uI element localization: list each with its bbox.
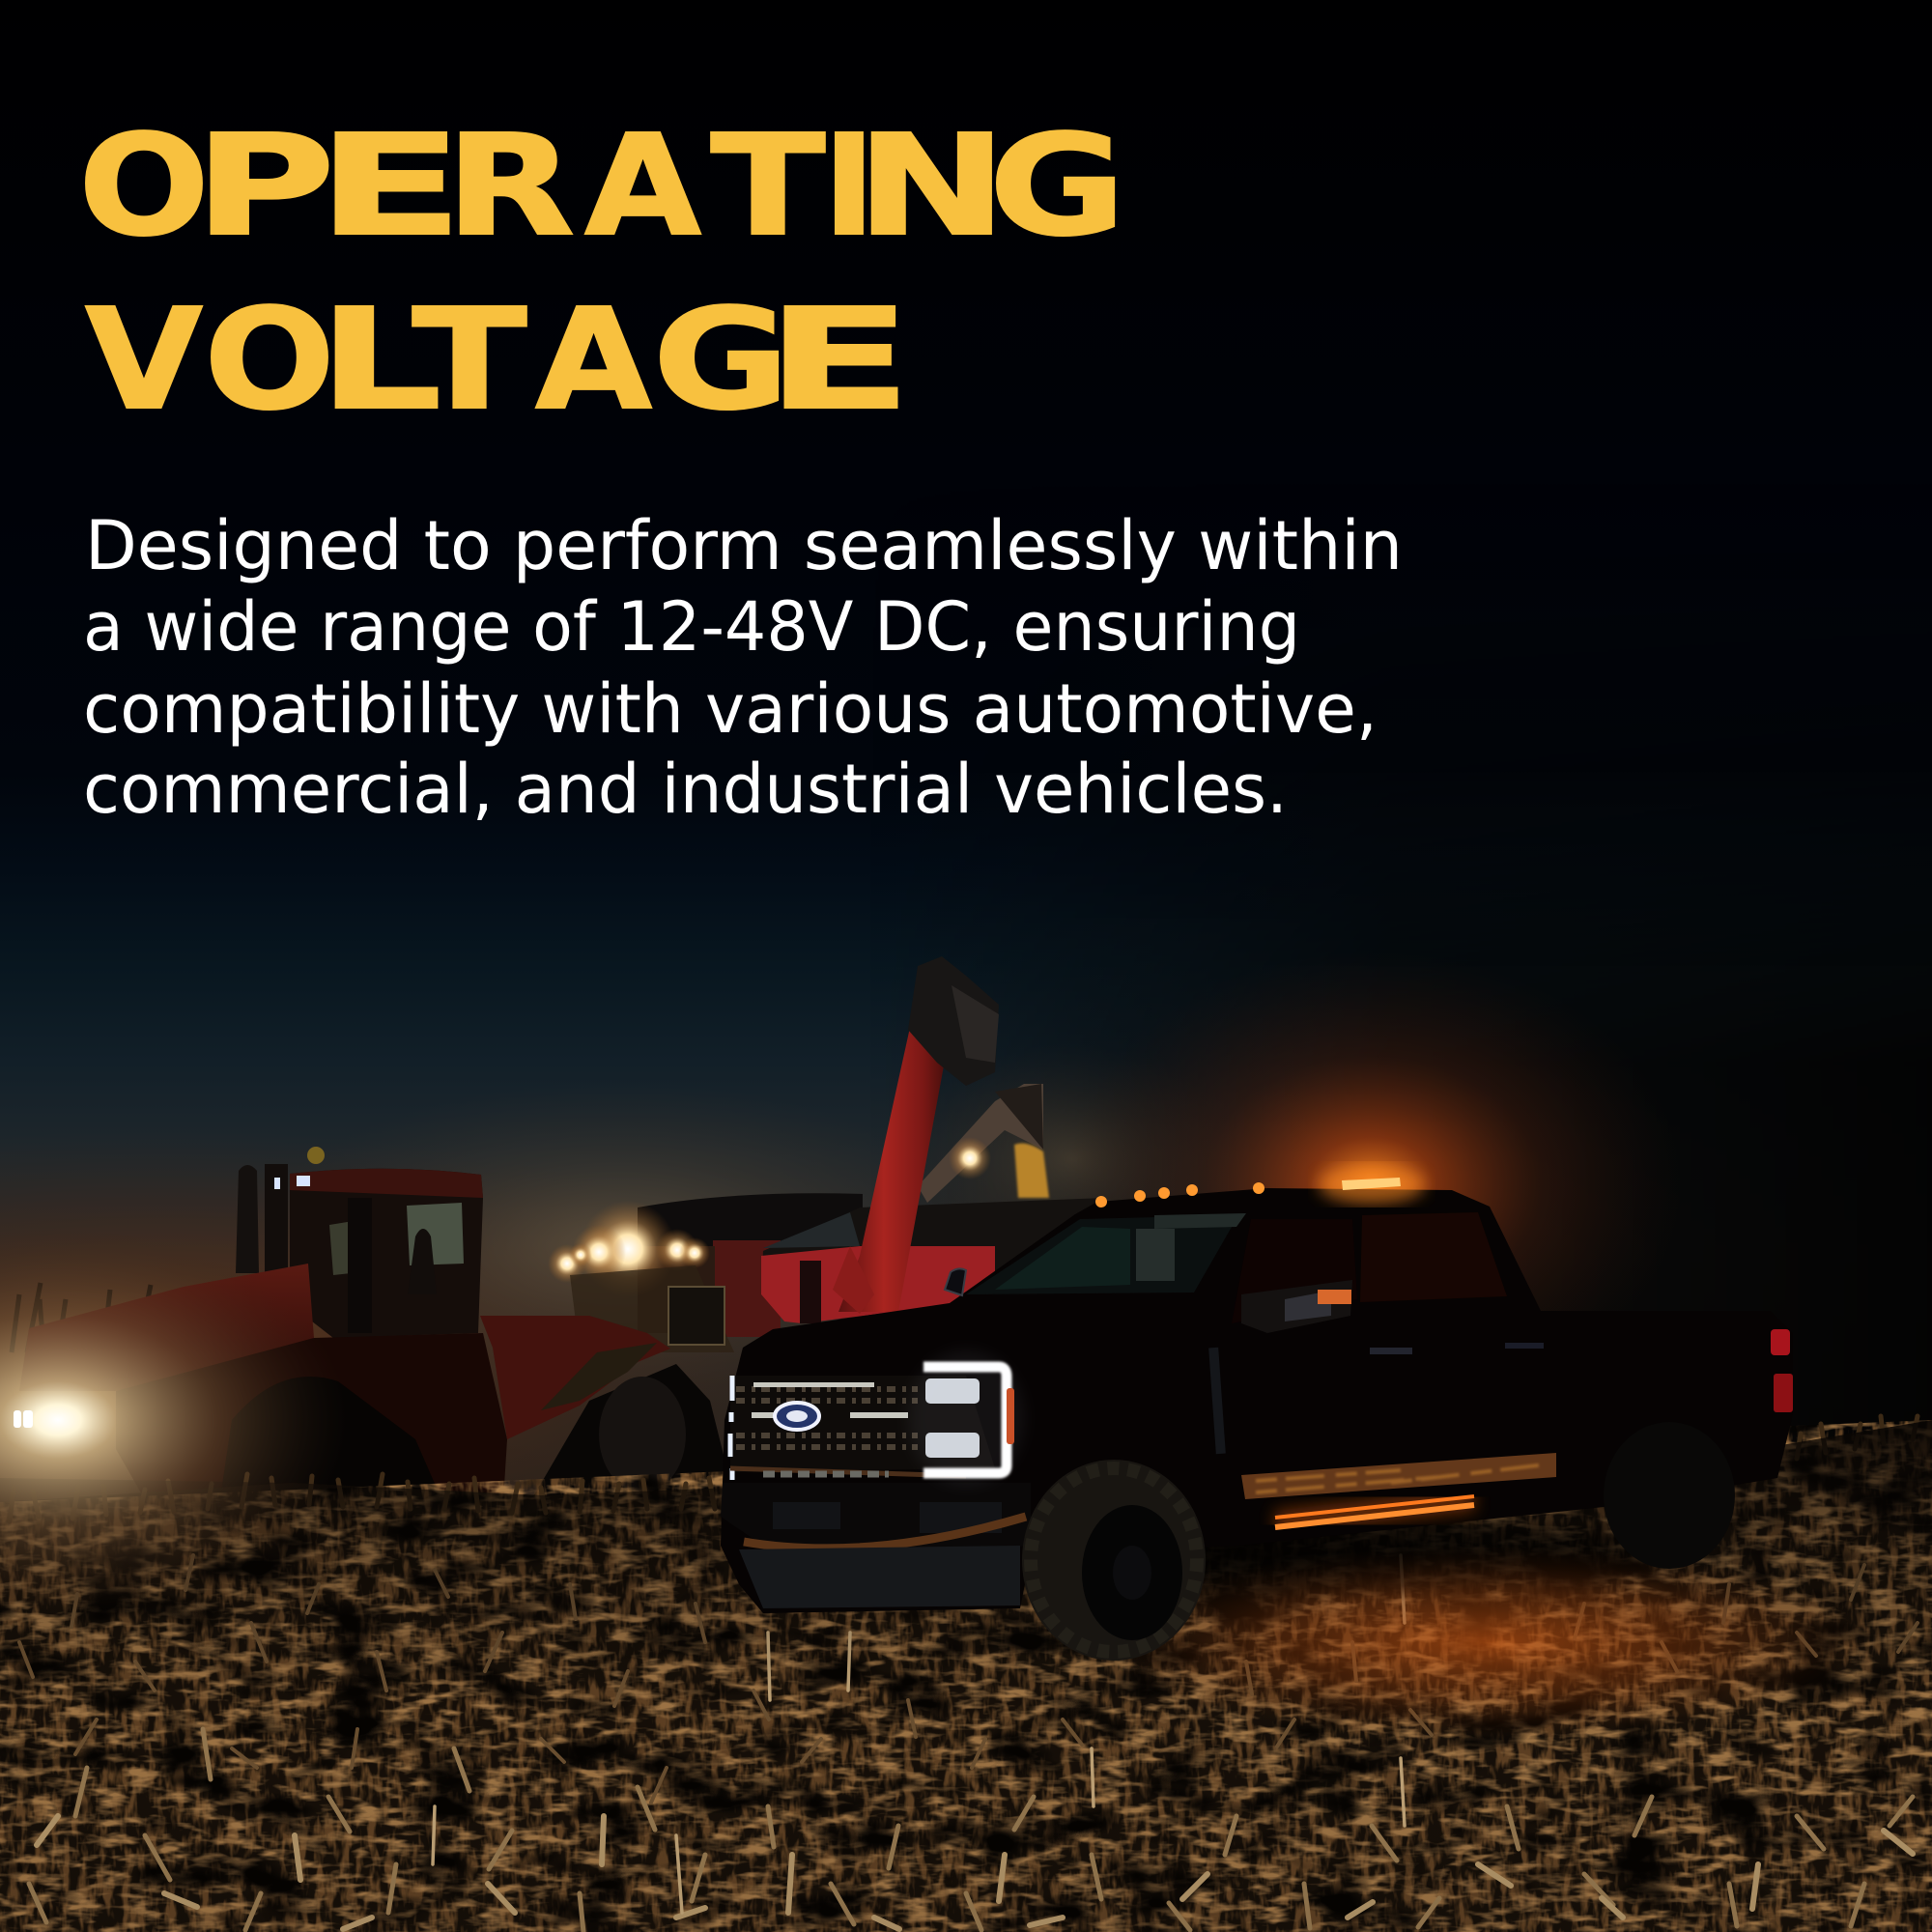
title line two: [84, 278, 912, 440]
title line two: A: [535, 278, 652, 440]
title line one: R: [445, 104, 575, 267]
title line two: O: [204, 278, 335, 440]
title line two: V: [85, 278, 203, 440]
title line one: G: [989, 104, 1126, 267]
grille: [730, 1376, 995, 1480]
rear fender: [480, 1316, 670, 1439]
falling grain: [1014, 1144, 1049, 1198]
ford oval badge: [775, 1403, 819, 1430]
grain cart, rear: [638, 1193, 863, 1337]
title line two: T: [412, 278, 527, 440]
edge stalks along the horizon of the field: [10, 1416, 1918, 1521]
amber glow from roof beacon: [1063, 952, 1681, 1415]
body text: a wide range of 12-48V DC, ensuring: [83, 587, 1300, 667]
tracks: [217, 1364, 724, 1517]
tractor headlight glow: [0, 1227, 348, 1613]
cab windows: [1232, 1212, 1507, 1323]
body text: [83, 506, 1403, 829]
title line one: O: [78, 104, 210, 267]
tractor: [19, 1147, 724, 1517]
truck body: [721, 1188, 1793, 1613]
headlight housing: [923, 1367, 1014, 1473]
title line one: [78, 104, 1126, 267]
lower valance: [739, 1546, 1020, 1608]
body text: commercial, and industrial vehicles.: [83, 750, 1288, 829]
stubble stalks: [19, 1555, 1918, 1932]
headlight bloom: [908, 1350, 1024, 1486]
grain cart, front: [761, 1198, 1106, 1323]
shadow under the truck: [753, 1507, 1758, 1604]
rear tail lights: [1771, 1329, 1793, 1412]
field of corn stubble: [0, 1416, 1932, 1932]
title line two: L: [319, 278, 442, 440]
title line one: T: [711, 104, 826, 267]
orange light pool on the ground: [1101, 1546, 1874, 1739]
title line one: I: [822, 104, 876, 267]
amber running board light: [1275, 1496, 1474, 1527]
tractor body: [116, 1333, 507, 1517]
title line two: E: [766, 278, 912, 440]
auger tube: [833, 956, 999, 1314]
rear wheel: [1604, 1422, 1735, 1569]
sky background: [0, 484, 1932, 1502]
roof clearance lights and beacon: [1095, 1165, 1425, 1208]
title line one: P: [194, 104, 335, 267]
corn stalks at left horizon: [12, 1283, 151, 1352]
windshield: [966, 1215, 1238, 1294]
door handles: [1208, 1343, 1544, 1454]
ground shading: [0, 1420, 1932, 1932]
photograph: night harvest scene with truck and tractor: [0, 484, 1932, 1932]
reflective rocker panel: [1241, 1453, 1556, 1499]
title line one: E: [317, 104, 464, 267]
tractor hood: [19, 1264, 314, 1391]
front wheel: [1022, 1460, 1206, 1661]
title line one: A: [584, 104, 701, 267]
front bumper: [721, 1483, 1031, 1555]
title line one: N: [856, 104, 1008, 267]
harvester lights: [548, 1201, 734, 1352]
title line two: G: [653, 278, 790, 440]
tractor exhaust: [236, 1165, 259, 1273]
driver side mirror: [945, 1268, 966, 1295]
body text: Designed to perform seamlessly within: [85, 506, 1403, 585]
grain spout: [918, 1084, 1043, 1203]
pickup truck: [721, 1188, 1793, 1661]
tractor cab: [265, 1147, 483, 1338]
side mirror: [1241, 1280, 1352, 1333]
body text: compatibility with various automotive,: [83, 669, 1378, 749]
